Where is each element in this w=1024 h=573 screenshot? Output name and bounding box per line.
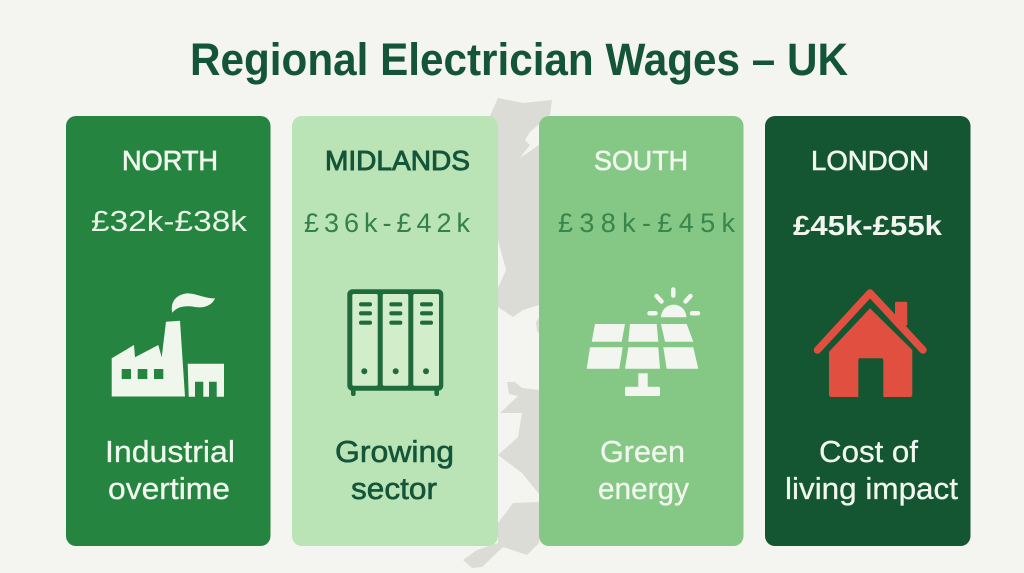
description: London: Cost of (819, 434, 918, 469)
description: South: energy (598, 471, 689, 506)
description: North: Industrial (105, 434, 235, 469)
description: London: living impact (785, 471, 958, 506)
panel: Midlands (292, 116, 498, 546)
heading: South: SOUTH (594, 145, 688, 176)
wage: South: £38k-£45k (558, 208, 736, 238)
description: Midlands: sector (351, 471, 437, 506)
icon: solar panel (587, 290, 698, 396)
panel: South (539, 116, 744, 546)
panel: London (765, 116, 970, 546)
description: South: Green (600, 434, 685, 469)
wage: North: £32k-£38k (91, 206, 248, 238)
heading: London: LONDON (811, 145, 929, 176)
background map of the UK (463, 98, 552, 568)
heading: Midlands: MIDLANDS (325, 145, 470, 176)
wage: London: £45k-£55k (793, 210, 942, 241)
wage: Midlands: £36k-£42k (304, 208, 470, 238)
icon: house (818, 293, 923, 397)
icon: lockers (347, 289, 443, 396)
icon: factory (112, 293, 224, 397)
heading: North: NORTH (122, 145, 218, 176)
panel: North (66, 116, 270, 546)
description: North: overtime (108, 471, 230, 506)
title: Regional Electrician Wages – UK (190, 34, 848, 85)
description: Midlands: Growing (335, 434, 454, 469)
